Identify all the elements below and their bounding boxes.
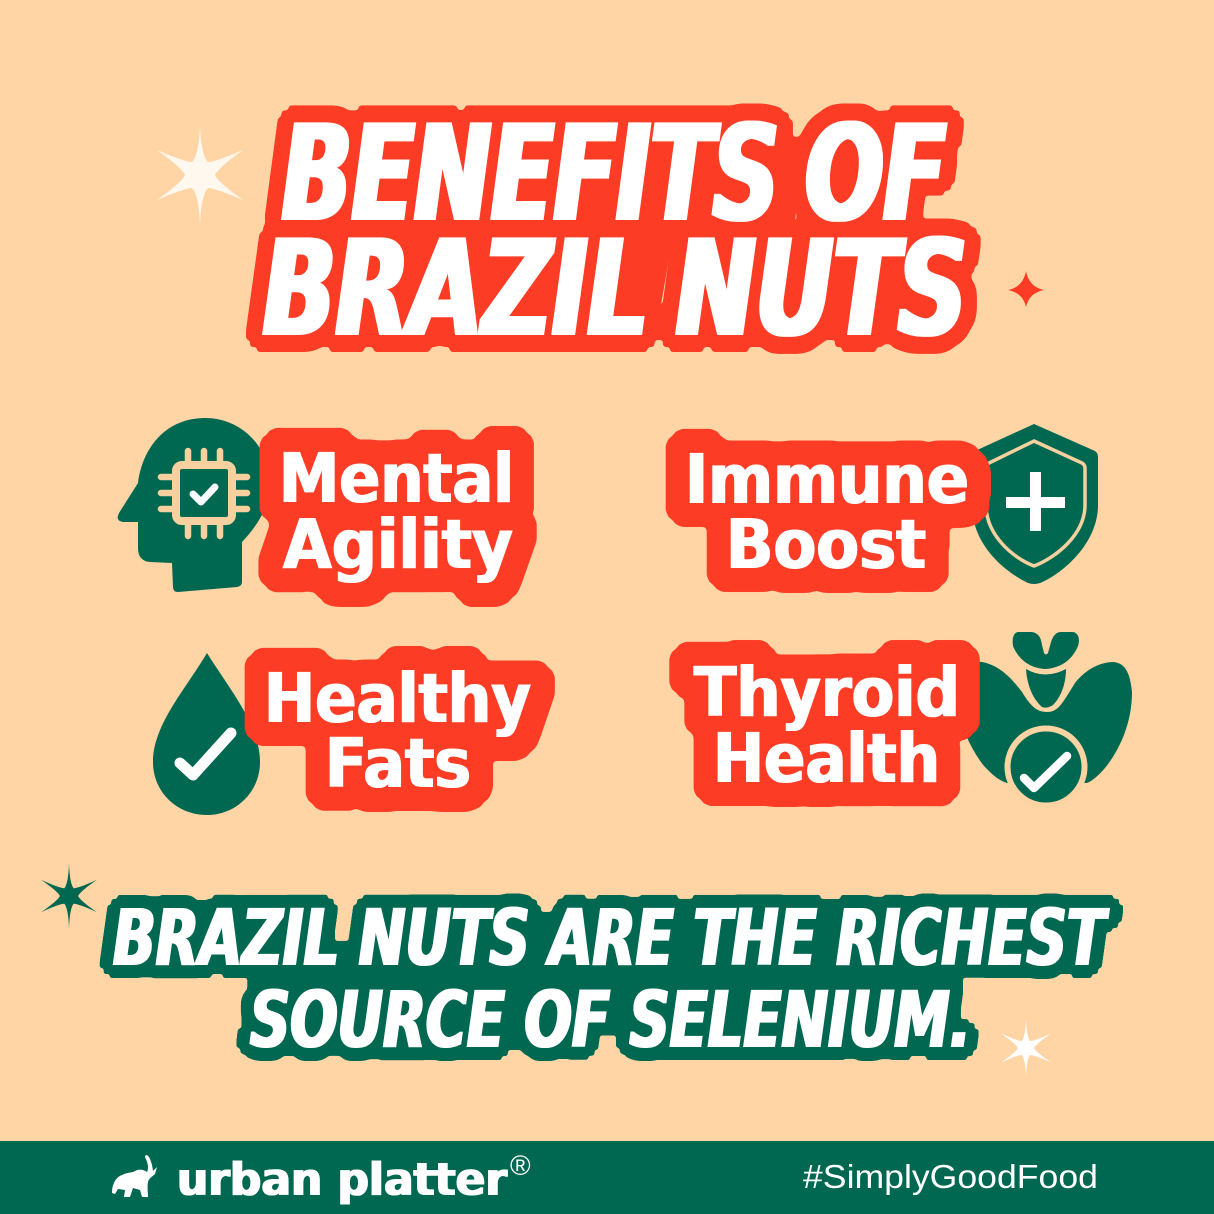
benefit: Healthy Fats: Fats [325,724,471,804]
benefit: Mental Agility [279,439,514,585]
title: Benefits of Brazil Nuts [263,96,967,367]
footer band [0,1141,1214,1214]
icon: head with chip [118,418,270,592]
sparkle: red star right of title [1008,271,1044,307]
benefit: Healthy Fats: Healthy [264,659,531,739]
benefit: Thyroid Health: Thyroid [694,653,960,733]
sparkle: cream star top left [157,125,243,225]
icon: elephant logo [112,1155,157,1197]
benefit: Mental Agility: Agility [283,505,513,585]
benefit: Immune Boost [685,440,969,585]
hashtag: #SimplyGoodFood [803,1158,1098,1195]
benefit: Mental Agility: Mental [279,439,514,519]
sparkle: white star bottom right [1001,1019,1051,1077]
brand name: urban platter [177,1153,508,1206]
benefit: Healthy Fats [264,659,531,804]
benefit: Thyroid Health [694,653,960,799]
title backing: fills gaps between words [625,150,800,310]
benefit: Immune Boost: Immune [685,440,969,520]
icon: thyroid with check [966,632,1132,806]
brand name: ® [510,1150,531,1181]
icon: shield with plus [972,424,1098,584]
benefit: Thyroid Health: Health [713,719,940,799]
statement: richest source of selenium [113,894,1109,1066]
icon: oil drop with check [153,653,260,815]
sparkle: green star bottom left [41,864,97,928]
benefit: Immune Boost: Boost [726,505,926,585]
